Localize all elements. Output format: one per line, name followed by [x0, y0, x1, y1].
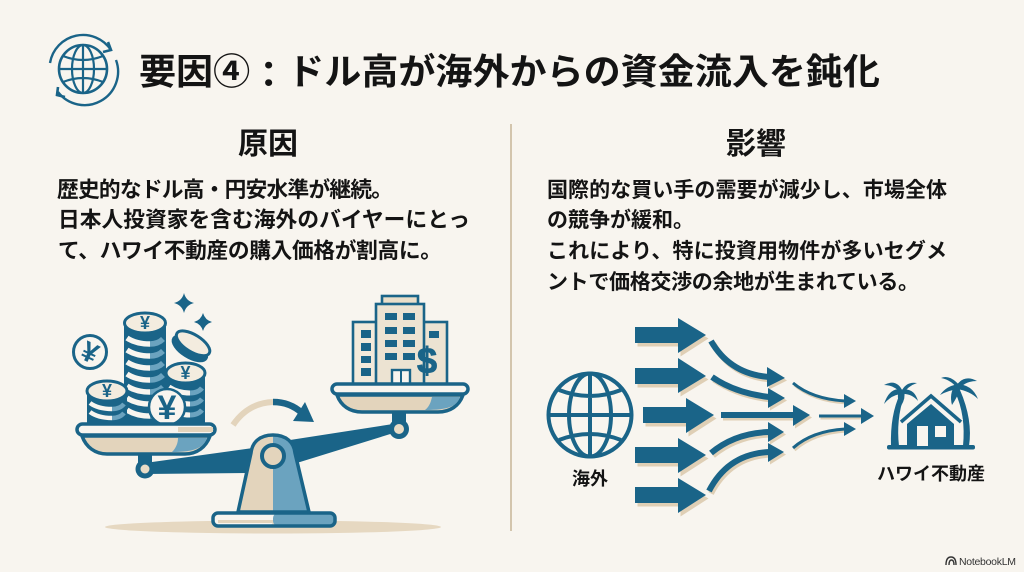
text block: impact: 国際的な買い手の需要が減少し、市場全体	[547, 178, 947, 202]
divider	[510, 124, 512, 531]
illustration: balance scale	[74, 293, 468, 534]
right coin stack	[166, 363, 205, 423]
watermark: NotebookLM: NotebookLM	[959, 556, 1016, 568]
left coin stack: ¥	[102, 381, 112, 401]
pan	[82, 436, 210, 454]
text block: cause: 歴史的なドル高・円安水準が継続。	[57, 177, 393, 202]
label: Hawaii real estate: ハワイ不動産	[877, 464, 985, 484]
icon: overseas globe	[548, 374, 632, 456]
tilted coin	[169, 326, 214, 366]
left pan with yen coins	[77, 313, 215, 454]
sparkles	[174, 293, 212, 331]
text block: impact: の競争が緩和。	[547, 208, 694, 232]
title: ドル高が海外からの資金流入を鈍化	[287, 51, 880, 92]
text block: cause: 日本人投資家を含む海外のバイヤーにとっ	[58, 207, 470, 232]
title: 要因④	[139, 51, 247, 92]
heading: impact: 影響	[726, 128, 786, 161]
flow arrows: large	[635, 318, 716, 516]
beam	[145, 424, 400, 474]
flow arrows: small curved	[793, 383, 874, 450]
text block: impact: これにより、特に投資用物件が多いセグメ	[547, 239, 947, 263]
floating yen coin: ¥	[76, 335, 104, 370]
heading: cause: 原因	[238, 128, 298, 161]
label: overseas: 海外	[572, 469, 608, 489]
icon: Hawaii house with palms	[884, 377, 978, 450]
tall coin stack: ¥	[140, 313, 150, 333]
tall coin stack	[124, 313, 166, 423]
building: $	[417, 340, 437, 381]
right pan with building	[332, 296, 468, 412]
front yen coin	[149, 389, 185, 427]
text block: impact: ントで価格交渉の余地が生まれている。	[547, 270, 919, 294]
title: ：	[250, 54, 287, 95]
text block: impact	[547, 178, 947, 294]
fulcrum	[213, 435, 335, 526]
pan	[337, 395, 463, 412]
text block: cause: て、ハワイ不動産の購入価格が割高に。	[58, 238, 442, 263]
left coin stack	[87, 381, 127, 423]
movement arrow	[233, 402, 314, 425]
front yen coin: ¥	[158, 389, 177, 427]
flow arrows: medium curved	[709, 341, 812, 494]
left hanger	[136, 450, 154, 478]
ground shadow	[105, 520, 441, 534]
right hanger	[389, 410, 409, 439]
right coin stack: ¥	[180, 363, 191, 383]
icon: rotating globe	[50, 35, 118, 105]
text block: cause	[57, 177, 470, 263]
